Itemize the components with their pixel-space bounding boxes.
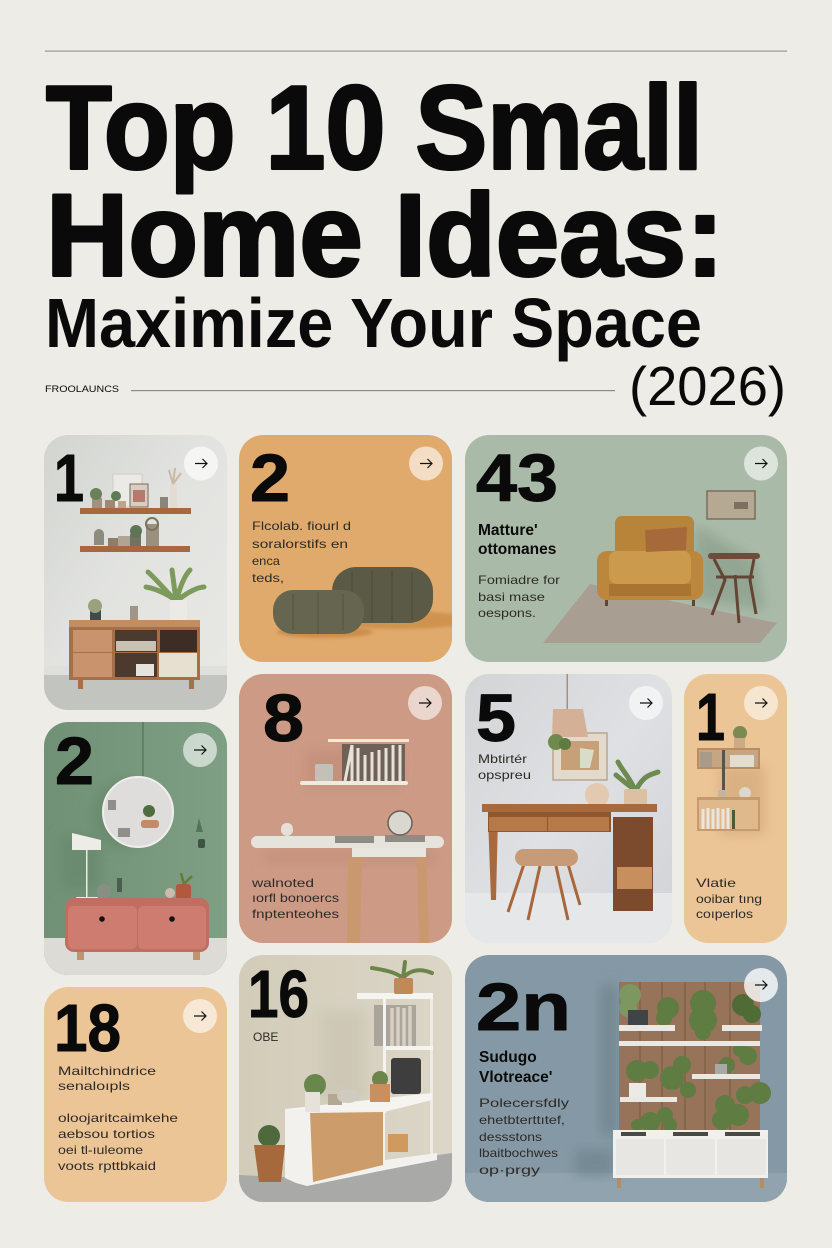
objects on shelf: [304, 1071, 390, 1112]
wall shelf with books: [300, 739, 409, 785]
arrow button: [744, 446, 778, 480]
heading text: senaloıpls: [58, 1079, 130, 1093]
panel: card 2 ottomans: [239, 435, 470, 662]
title: Top 10 Small: [46, 62, 703, 194]
description text: aebsou tortios: [58, 1127, 155, 1141]
armchair: [597, 516, 703, 606]
panel: card 5 desk and stool: [465, 674, 672, 943]
description text: lbaitbochwes: [479, 1146, 558, 1160]
description text: dessstons: [479, 1130, 542, 1144]
description text: [58, 1111, 178, 1173]
panel: card 16 white shelf unit: [239, 955, 452, 1202]
arrow button: [183, 999, 217, 1033]
subtitle: Maximize Your Space: [45, 284, 702, 362]
number: 18: [54, 991, 121, 1066]
foliage: [619, 984, 771, 1132]
description text: Flcolab. fiourl d: [252, 519, 351, 533]
white shelving unit: [285, 993, 437, 1186]
heading text: [58, 1064, 156, 1093]
round mirror: [103, 777, 173, 847]
description text: Fomiadre for: [478, 573, 560, 587]
objects on cabinet: [97, 873, 192, 900]
number: 2: [55, 724, 94, 799]
description text: Mbtirtér: [478, 752, 527, 766]
heading: Matture': [478, 522, 538, 539]
description text: fnptenteohes: [252, 907, 339, 921]
arrow button: [183, 733, 217, 767]
description text: enca: [252, 554, 280, 568]
wood plank panel: [619, 982, 760, 1130]
basket plant: [254, 1125, 285, 1182]
number: 16: [248, 957, 309, 1032]
arrow button: [184, 446, 218, 480]
panel: card 2n vertical garden: [465, 955, 787, 1202]
white cabinet: [613, 1130, 768, 1188]
description text: oloojaritcaimkehe: [58, 1111, 178, 1125]
rug: [543, 584, 777, 643]
front ottoman: [273, 590, 364, 634]
description text: walnoted: [251, 876, 314, 890]
description text: basi mase: [478, 590, 545, 604]
subtitle: (2026): [629, 355, 786, 417]
side table: [708, 553, 760, 623]
title: [46, 62, 724, 300]
wall hooks: [196, 818, 205, 848]
description text: voots rpttbkaid: [58, 1159, 156, 1173]
number: 2n: [476, 970, 571, 1045]
panel: card 1 narrow wall shelf: [684, 674, 787, 943]
wall shelf: [697, 726, 760, 831]
description text: ehetbterttıtef,: [479, 1113, 565, 1127]
description text: op·prgy: [479, 1163, 540, 1177]
number: 5: [476, 681, 516, 756]
small label: FROOLAUNCS: [45, 384, 119, 395]
description text: [479, 1096, 569, 1177]
sideboard cabinet: [69, 599, 200, 689]
number: 43: [476, 441, 558, 516]
description text: ooibar tıng: [696, 892, 762, 906]
description text: Vlatie: [696, 876, 736, 890]
description text: opspreu: [478, 768, 531, 782]
heading: Sudugo: [479, 1049, 537, 1066]
arrow button: [408, 686, 442, 720]
heading: ottomanes: [478, 541, 556, 558]
pendant lamp: [548, 674, 588, 750]
plant in white vase: [144, 568, 206, 600]
arrow button: [744, 686, 778, 720]
description text: [478, 573, 560, 620]
description text: [251, 876, 339, 921]
stool: [508, 849, 580, 920]
description text: [478, 754, 530, 782]
potted plant and vase: [585, 762, 658, 807]
description text: [696, 876, 762, 921]
potted plant top: [372, 962, 432, 994]
heading: Vlotreace': [479, 1069, 552, 1086]
arrow button: [409, 446, 443, 480]
back ottoman: [332, 567, 433, 623]
description text: Polecersfdly: [479, 1096, 569, 1110]
description text: [252, 519, 351, 585]
panel: card 3 armchair: [465, 435, 787, 662]
floating shelves with objects: [80, 468, 191, 552]
description text: soralorstifs en: [252, 537, 348, 551]
description text: coıperlos: [696, 907, 753, 921]
description text: oei tl-ıuleome: [58, 1143, 143, 1157]
desk: [251, 811, 444, 943]
heading: [479, 1049, 552, 1086]
pink cabinet: [65, 898, 209, 960]
white shelves and pots: [619, 1025, 762, 1102]
heading: [478, 524, 556, 554]
number: 8: [263, 681, 304, 756]
panel: card 1 wall shelves and cabinet: [44, 435, 227, 710]
panel: card 2 green wall with mirror: [44, 722, 227, 975]
panel: card 18 text: [44, 987, 227, 1202]
title: Home Ideas:: [46, 170, 724, 300]
arrow button: [629, 686, 663, 720]
number: 2: [250, 441, 290, 516]
arrow button: [744, 968, 778, 1002]
number: 1: [54, 441, 84, 516]
description text: oespons.: [478, 606, 536, 620]
description text: teds,: [252, 571, 284, 585]
description text: ıorfl bonoercs: [252, 891, 339, 905]
framed picture: [553, 733, 607, 780]
label: OBE: [253, 1030, 278, 1044]
heading text: Mailtchindrice: [58, 1064, 156, 1078]
subtitle: [45, 284, 786, 417]
wooden desk: [482, 804, 657, 911]
number: 1: [696, 680, 725, 755]
wall picture: [707, 491, 755, 519]
table lamp: [72, 833, 101, 900]
panel: card 8 wall desk: [239, 674, 452, 943]
